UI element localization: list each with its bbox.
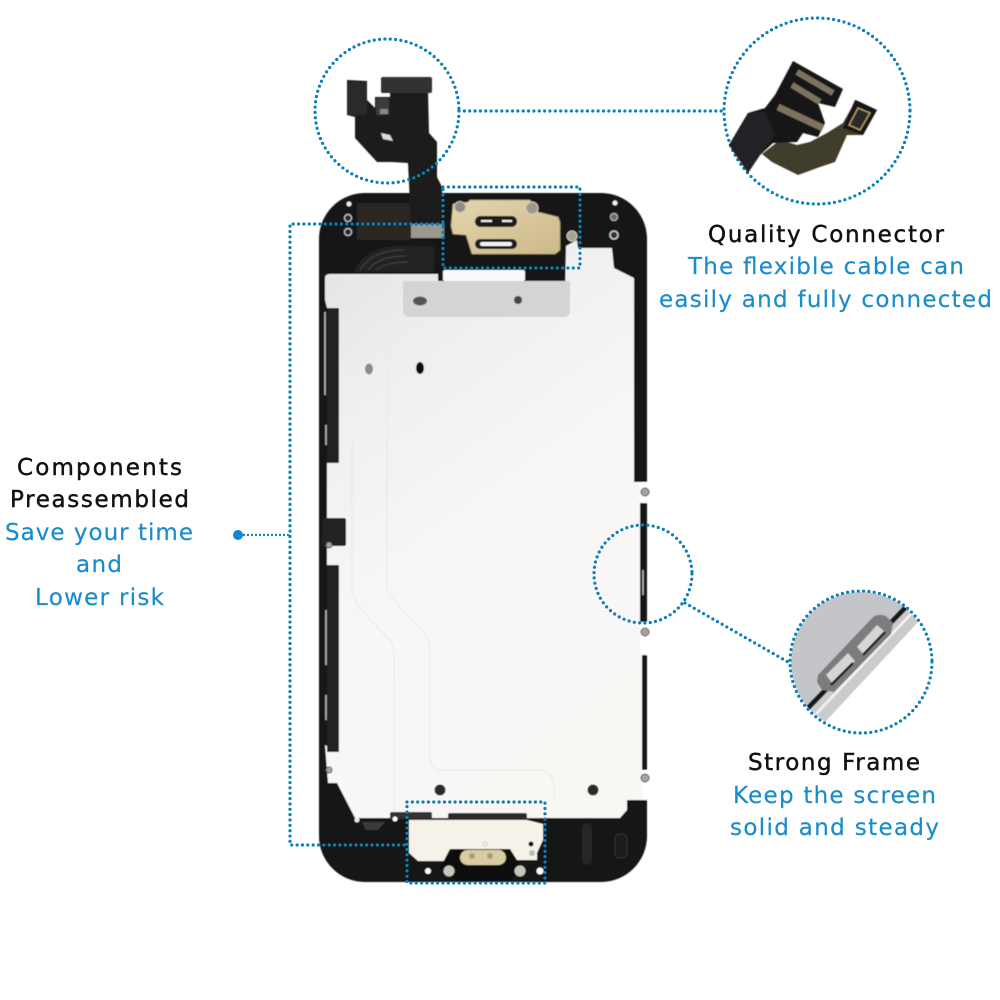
text: strong frame: Strong Frame (748, 750, 920, 776)
gold contact strips (778, 72, 833, 128)
text: components preassembled: Lower risk (35, 585, 165, 611)
cable tail (729, 112, 775, 173)
grey backing (791, 592, 904, 714)
side screws (326, 488, 649, 782)
charging port (440, 842, 522, 880)
bottom screws and holes (425, 842, 544, 876)
plate holes (365, 296, 598, 796)
frame callout circle (594, 525, 692, 623)
silver edge strip (810, 606, 920, 722)
plate embossed lines (352, 317, 554, 815)
icon: frame close-up (791, 592, 918, 722)
connector callout circle (top of flex) (315, 39, 459, 183)
silver rail highlights (325, 312, 643, 720)
text: components preassembled: and (76, 552, 122, 578)
link line to frame zoom (685, 603, 788, 662)
tab windows (826, 625, 885, 684)
left pointer line (244, 534, 290, 536)
right connector (843, 100, 877, 135)
top interior: camera recess (357, 203, 411, 240)
flex cable (347, 77, 442, 224)
black seam (808, 607, 906, 708)
seam under tab (831, 632, 885, 685)
black phone frame (319, 193, 647, 882)
metal back plate (325, 240, 647, 818)
connector zoom circle (724, 18, 910, 204)
left pointer dot (233, 530, 243, 540)
text: quality connector: Quality Connector (708, 222, 945, 248)
icon: flex connector close-up (729, 61, 877, 175)
text: strong frame: solid and steady (730, 815, 939, 841)
top dotted selection box (443, 187, 580, 268)
grey flex connector (411, 224, 444, 238)
text: strong frame (730, 750, 939, 841)
bottom interior details (354, 812, 627, 865)
link line to connector zoom (459, 109, 723, 113)
black board (729, 61, 843, 173)
earpiece sensors left (344, 202, 352, 236)
earpiece sensors right (610, 200, 618, 239)
text: strong frame: Keep the screen (733, 783, 936, 809)
phone screen assembly (319, 77, 649, 882)
ribbon arcs (354, 246, 434, 272)
text: components preassembled: Preassembled (10, 487, 189, 513)
text: components preassembled (5, 455, 193, 611)
text: components preassembled: Components (17, 455, 182, 481)
olive flex (762, 100, 877, 175)
text: quality connector: easily and fully connected (659, 287, 992, 313)
frame zoom circle (790, 591, 932, 733)
white slot (443, 270, 525, 281)
inset plate panel (403, 281, 570, 317)
gold shield bracket (451, 200, 577, 254)
bottom dotted selection box (407, 802, 545, 883)
text: quality connector (659, 222, 992, 313)
side rails (322, 308, 346, 752)
left dotted bracket (290, 224, 443, 845)
dock shield plate (409, 820, 543, 861)
text: components preassembled: Save your time (5, 520, 193, 546)
text: quality connector: The flexible cable can (687, 254, 964, 280)
white gaps on right edge (640, 482, 649, 800)
metal tab (817, 615, 893, 692)
